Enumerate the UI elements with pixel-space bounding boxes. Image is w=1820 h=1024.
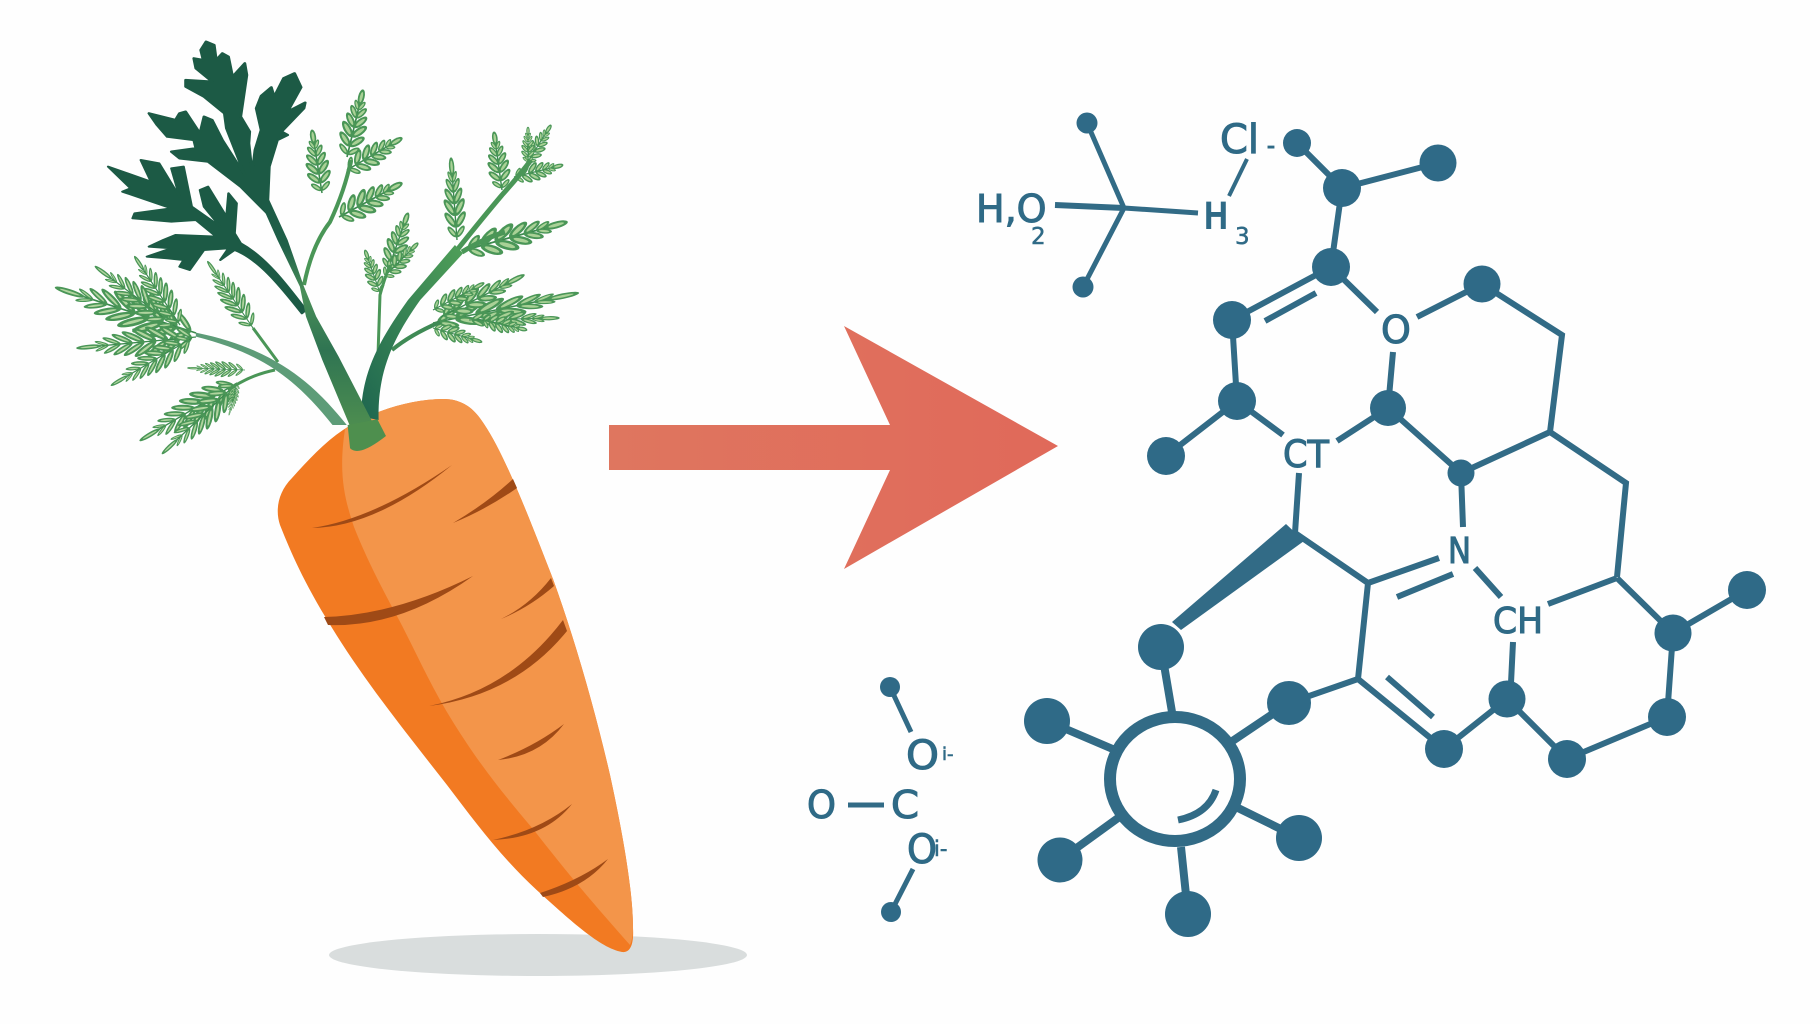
ground shadow: [329, 934, 747, 976]
carrot skin grooves: [312, 465, 608, 897]
small molecule top left: [976, 112, 1250, 298]
right frond: [439, 119, 572, 266]
atoms: [880, 677, 901, 922]
carrot leaves: [48, 42, 582, 466]
benzene ring: [1110, 717, 1240, 841]
label dash: -: [1267, 134, 1275, 159]
bonds: [848, 687, 913, 912]
carrot illustration: [278, 399, 633, 952]
label C: C: [891, 783, 919, 827]
carrot body: [278, 399, 633, 952]
stem base cap: [348, 419, 386, 451]
large molecule: [1024, 117, 1766, 937]
ring spokes: [1047, 647, 1299, 914]
label lower charge: i-: [934, 837, 947, 861]
label N: N: [1448, 531, 1471, 572]
label CT: CT: [1283, 433, 1329, 476]
carbonate fragment: [807, 677, 954, 922]
dark top leaf: [149, 42, 305, 213]
subscript 2: 2: [1031, 224, 1046, 250]
dark left leaf: [108, 160, 306, 313]
lower right frond: [392, 264, 582, 351]
atoms: [1024, 129, 1766, 937]
label CH: CH: [1493, 601, 1543, 642]
bonds: [1166, 143, 1747, 759]
left fine fronds: [48, 248, 278, 466]
label H,O2: H,O: [976, 187, 1047, 231]
main stalk: [261, 200, 377, 432]
label lower O: O: [907, 827, 937, 873]
label upper O: O: [906, 733, 939, 779]
label Cl: Cl: [1220, 117, 1259, 163]
small centre frond: [356, 208, 426, 355]
arrow: [609, 326, 1058, 569]
subscript 3: 3: [1235, 224, 1250, 250]
wedge bond: [1172, 524, 1304, 630]
label left O: O: [807, 783, 836, 827]
stalks and dark leaves: [108, 42, 463, 451]
atoms: [1072, 112, 1098, 298]
right stalk: [361, 245, 463, 420]
pale left stalk: [196, 333, 347, 425]
label H3: H: [1204, 197, 1228, 237]
label upper charge: i-: [942, 744, 954, 765]
label O: O: [1381, 308, 1411, 352]
centre frond: [298, 86, 410, 285]
bonds: [1055, 123, 1247, 287]
